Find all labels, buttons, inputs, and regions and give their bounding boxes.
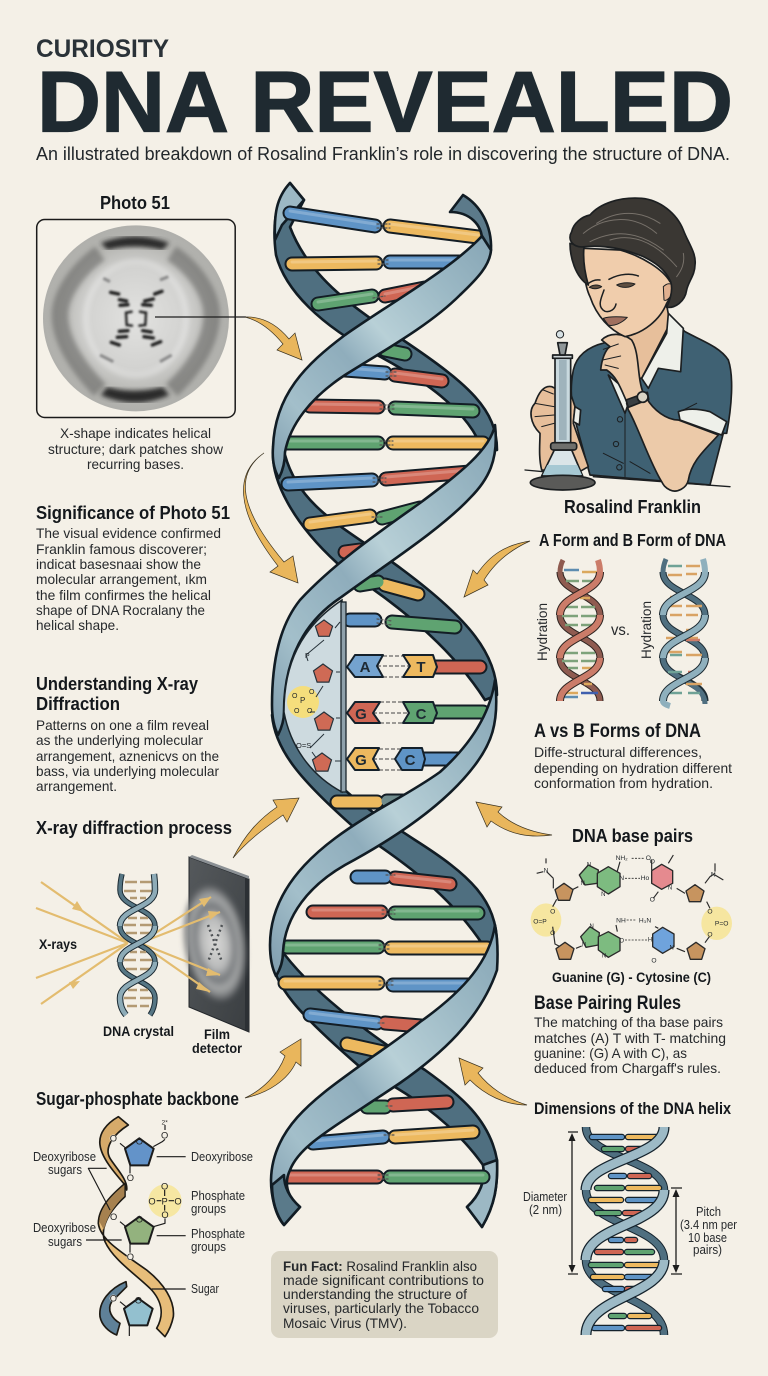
sleeve cuff (678, 409, 727, 435)
cutaway panel: sugar phosphate detail (284, 600, 346, 792)
atoms: P (162, 1196, 168, 1206)
hydration labels: Hydration (535, 603, 550, 661)
a form helix (560, 560, 600, 701)
atoms: O (110, 1134, 117, 1144)
base pair molecules: O (550, 908, 555, 915)
heading: Dimensions of the DNA helix (534, 1099, 731, 1118)
text block: significance of photo 51 (36, 502, 230, 633)
bonds and leader lines (86, 1125, 186, 1336)
base pair molecules: N (582, 943, 586, 949)
text block: significance of photo 51: the film confirmes the helical (36, 587, 211, 603)
hydration labels (535, 601, 654, 661)
central double helix (270, 183, 498, 1227)
heading: Photo 51 (100, 193, 170, 213)
cutaway panel: sugar phosphate detail: O (294, 708, 300, 715)
phosphate glow (148, 1184, 182, 1218)
backbone labels: Phosphate (191, 1227, 245, 1241)
base pair molecules: Ho (641, 875, 650, 882)
atoms: 2* (162, 1119, 168, 1126)
flask (555, 357, 571, 443)
base labels: G (355, 706, 367, 723)
text block: significance of photo 51: molecular arrangement, ıkm (36, 571, 207, 587)
text block: understanding x-ray diffraction: bass, via underlying molecular (36, 763, 219, 779)
base labels: C (416, 706, 427, 723)
base labels: A (360, 659, 371, 676)
panel: photo 51 (37, 193, 235, 472)
hydration labels: Hydration (639, 601, 654, 659)
diagram labels: X-rays (39, 937, 77, 952)
text block: understanding x-ray diffraction: arrangement. (36, 778, 117, 794)
base labels: T (416, 659, 426, 676)
text block: significance of photo 51: Franklin famous discoverer; (36, 541, 207, 557)
text block: understanding x-ray diffraction: Understanding X-ray (36, 673, 199, 694)
base pair molecules: N (602, 953, 606, 959)
callout: fun fact: made significant contributions to (283, 1272, 484, 1288)
diagram labels (39, 937, 242, 1056)
atoms: O (148, 1196, 156, 1206)
text block: base pairing rules: The matching of tha base pairs (534, 1014, 723, 1030)
atoms: O (174, 1196, 182, 1206)
backbone labels: Deoxyribose (33, 1221, 96, 1235)
title block (36, 35, 733, 164)
text block: base pairing rules: matches (A) T with T- matching (534, 1030, 726, 1046)
backbone labels: groups (191, 1240, 226, 1254)
arrow: x-ray process to helix (233, 798, 299, 858)
callout: fun fact: Fun Fact: Rosalind Franklin also (283, 1258, 477, 1274)
dimensions helix (586, 1127, 664, 1335)
diffraction pattern (43, 225, 229, 411)
text block: a vs b forms (534, 721, 732, 791)
heading: x-ray diffraction process: X-ray diffraction process (36, 817, 232, 838)
arrow: base pairs to helix (476, 802, 552, 836)
base pair molecules: NH (616, 917, 626, 924)
b form helix (663, 559, 705, 706)
sugar pentagons (124, 1138, 154, 1325)
portrait: rosalind franklin (525, 198, 732, 517)
base pair molecules: N (668, 885, 672, 891)
callout: fun fact: understanding the structure of (283, 1286, 467, 1302)
heading: sugar-phosphate backbone: Sugar-phosphate backbone (36, 1088, 239, 1109)
base pair molecules: P=O (715, 921, 728, 928)
text block: significance of photo 51: helical shape. (36, 617, 119, 633)
hand holding flask (531, 386, 588, 473)
beam arrowheads (69, 897, 220, 992)
base pair molecules: O (707, 908, 713, 915)
atoms: O (127, 1173, 134, 1183)
base pair molecules: O (650, 858, 655, 865)
hair (570, 243, 588, 285)
text block: base pairing rules: Base Pairing Rules (534, 993, 681, 1014)
atoms: O (136, 1215, 143, 1225)
wristwatch (626, 392, 649, 407)
kicker: CURIOSITY (36, 35, 169, 63)
base labels (347, 655, 437, 770)
diagram labels: Film (204, 1026, 230, 1042)
base pair molecules: N (544, 868, 549, 875)
arrow: dimensions to helix (459, 1058, 527, 1105)
base pair molecules: O (619, 938, 624, 944)
neck (622, 305, 670, 378)
backbone labels: Sugar (191, 1282, 219, 1296)
atoms: O (161, 1182, 168, 1192)
text block: base pairing rules: deduced from Chargaff's rules. (534, 1060, 721, 1076)
text block: significance of photo 51: shape of DNA Rocralany the (36, 602, 205, 618)
arrow: photo 51 to helix (155, 317, 302, 360)
atoms: O (161, 1210, 169, 1220)
pitch measure: 10 base (688, 1231, 727, 1245)
atoms (110, 1119, 182, 1305)
cutaway panel: sugar phosphate detail: P (305, 653, 310, 660)
backbone labels: sugars (48, 1235, 82, 1249)
callout: fun fact: viruses, particularly the Tobacco (283, 1300, 479, 1316)
base pair molecules: O (707, 932, 713, 939)
base pair molecules: N (590, 924, 594, 930)
forearm (627, 398, 718, 491)
base pair molecules: N (587, 863, 591, 869)
table line (525, 470, 730, 487)
diameter measure: Diameter (523, 1190, 567, 1204)
diagram labels: DNA crystal (103, 1023, 174, 1039)
pitch measure: pairs) (693, 1243, 722, 1257)
text block: a vs b forms: A vs B Forms of DNA (534, 721, 701, 742)
text block: a vs b forms: depending on hydration different (534, 760, 732, 776)
hand at chin (601, 334, 643, 402)
panel: dimensions of the dna helix (523, 1099, 737, 1335)
heading: DNA base pairs (572, 826, 693, 846)
backbone ribbon (98, 1117, 173, 1337)
pitch measure: (3.4 nm per (680, 1218, 737, 1232)
base pair molecules: O (650, 897, 655, 904)
atoms: O (161, 1130, 168, 1140)
text block: understanding x-ray diffraction: as the underlying molecular (36, 732, 203, 748)
name label: Rosalind Franklin (564, 497, 701, 517)
base labels: G (355, 752, 367, 769)
diagram: sugar-phosphate backbone (33, 1117, 253, 1337)
base pair molecules (531, 855, 732, 964)
subtitle: An illustrated breakdown of Rosalind Franklin’s role in discovering the structure of DNA. (36, 143, 730, 164)
base pair molecules: N (670, 945, 674, 951)
caption: recurring bases. (87, 456, 184, 472)
heading: A Form and B Form of DNA (539, 530, 726, 550)
panel: dna base pairs (531, 826, 732, 985)
text block: understanding x-ray diffraction (36, 673, 219, 794)
front strands (270, 195, 498, 1225)
x-ray beams (36, 882, 220, 1004)
pair caption: Guanine (G) - Cytosine (C) (552, 970, 711, 985)
backbone labels: sugars (48, 1163, 82, 1177)
backbone labels: groups (191, 1202, 226, 1216)
base labels: C (405, 752, 416, 769)
text block: understanding x-ray diffraction: arrangement, aznenicvs on the (36, 748, 219, 764)
caption (48, 425, 224, 472)
vs label: vs. (611, 622, 630, 639)
diameter measure: (2 nm) (529, 1203, 562, 1217)
text block: significance of photo 51: The visual evidence confirmed (36, 525, 221, 541)
base pair molecules: N (619, 875, 624, 882)
dna crystal (120, 874, 155, 1015)
base pair molecules: O (651, 957, 657, 964)
diameter measure (523, 1132, 578, 1274)
base pair molecules: O=P (533, 918, 547, 925)
cutaway panel: sugar phosphate detail: O (309, 689, 315, 696)
arrow: a and b forms to helix (464, 541, 530, 597)
text block: understanding x-ray diffraction: Diffraction (36, 693, 120, 714)
text block: base pairing rules: guanine: (G) A with C), as (534, 1045, 687, 1061)
base pair molecules: N (711, 872, 716, 879)
text block: understanding x-ray diffraction: Patterns on one a film reveal (36, 717, 209, 733)
base pair molecules: N (581, 881, 585, 887)
base pair molecules: NH₂ (616, 855, 628, 862)
back strands (272, 183, 497, 1227)
atoms: O (135, 1295, 142, 1305)
atoms: O (110, 1212, 117, 1222)
text block: a vs b forms: Diffe-structural differences, (534, 744, 702, 760)
arrow: significance to helix (243, 453, 298, 583)
callout: fun fact (271, 1251, 498, 1338)
film detector (177, 855, 253, 1032)
backbone labels: Deoxyribose (191, 1150, 253, 1164)
photo frame (37, 220, 235, 418)
face (583, 248, 672, 337)
atoms: O (127, 1252, 134, 1262)
backbone labels (33, 1150, 253, 1296)
arrow: backbone to helix (245, 1039, 301, 1098)
text block: base pairing rules (534, 993, 726, 1076)
pitch measure (671, 1188, 737, 1274)
base pair molecules: H₃N (639, 917, 651, 924)
cutaway panel: sugar phosphate detail: O (292, 693, 298, 700)
atoms: O (110, 1294, 117, 1304)
cutaway panel: sugar phosphate detail: P (300, 696, 305, 705)
text block: significance of photo 51: Significance of Photo 51 (36, 502, 230, 523)
diagram: x-ray diffraction (36, 855, 253, 1056)
base pair molecules: N (601, 892, 605, 898)
cutaway panel: sugar phosphate detail: O (307, 708, 313, 715)
backbone labels: Deoxyribose (33, 1150, 96, 1164)
callout: fun fact: Mosaic Virus (TMV). (283, 1315, 407, 1331)
main title: DNA REVEALED (37, 54, 733, 150)
base pair rungs (285, 211, 487, 1179)
base pair molecules: O (646, 855, 651, 862)
panel: a form and b form (535, 530, 726, 706)
pitch measure: Pitch (696, 1205, 721, 1219)
caption: structure; dark patches show (48, 441, 224, 457)
base pair molecules: O (550, 930, 555, 937)
cutaway panel: sugar phosphate detail: O=S (296, 741, 311, 750)
collar (642, 313, 683, 388)
atoms: O (136, 1136, 143, 1146)
blouse (571, 313, 732, 485)
base pair molecules: H (648, 938, 652, 944)
caption: X-shape indicates helical (60, 425, 211, 441)
facial features (588, 274, 638, 312)
diagram labels: detector (192, 1040, 242, 1056)
text block: a vs b forms: conformation from hydration. (534, 775, 713, 791)
text block: significance of photo 51: indicat basesnaai show the (36, 556, 201, 572)
backbone labels: Phosphate (191, 1189, 245, 1203)
